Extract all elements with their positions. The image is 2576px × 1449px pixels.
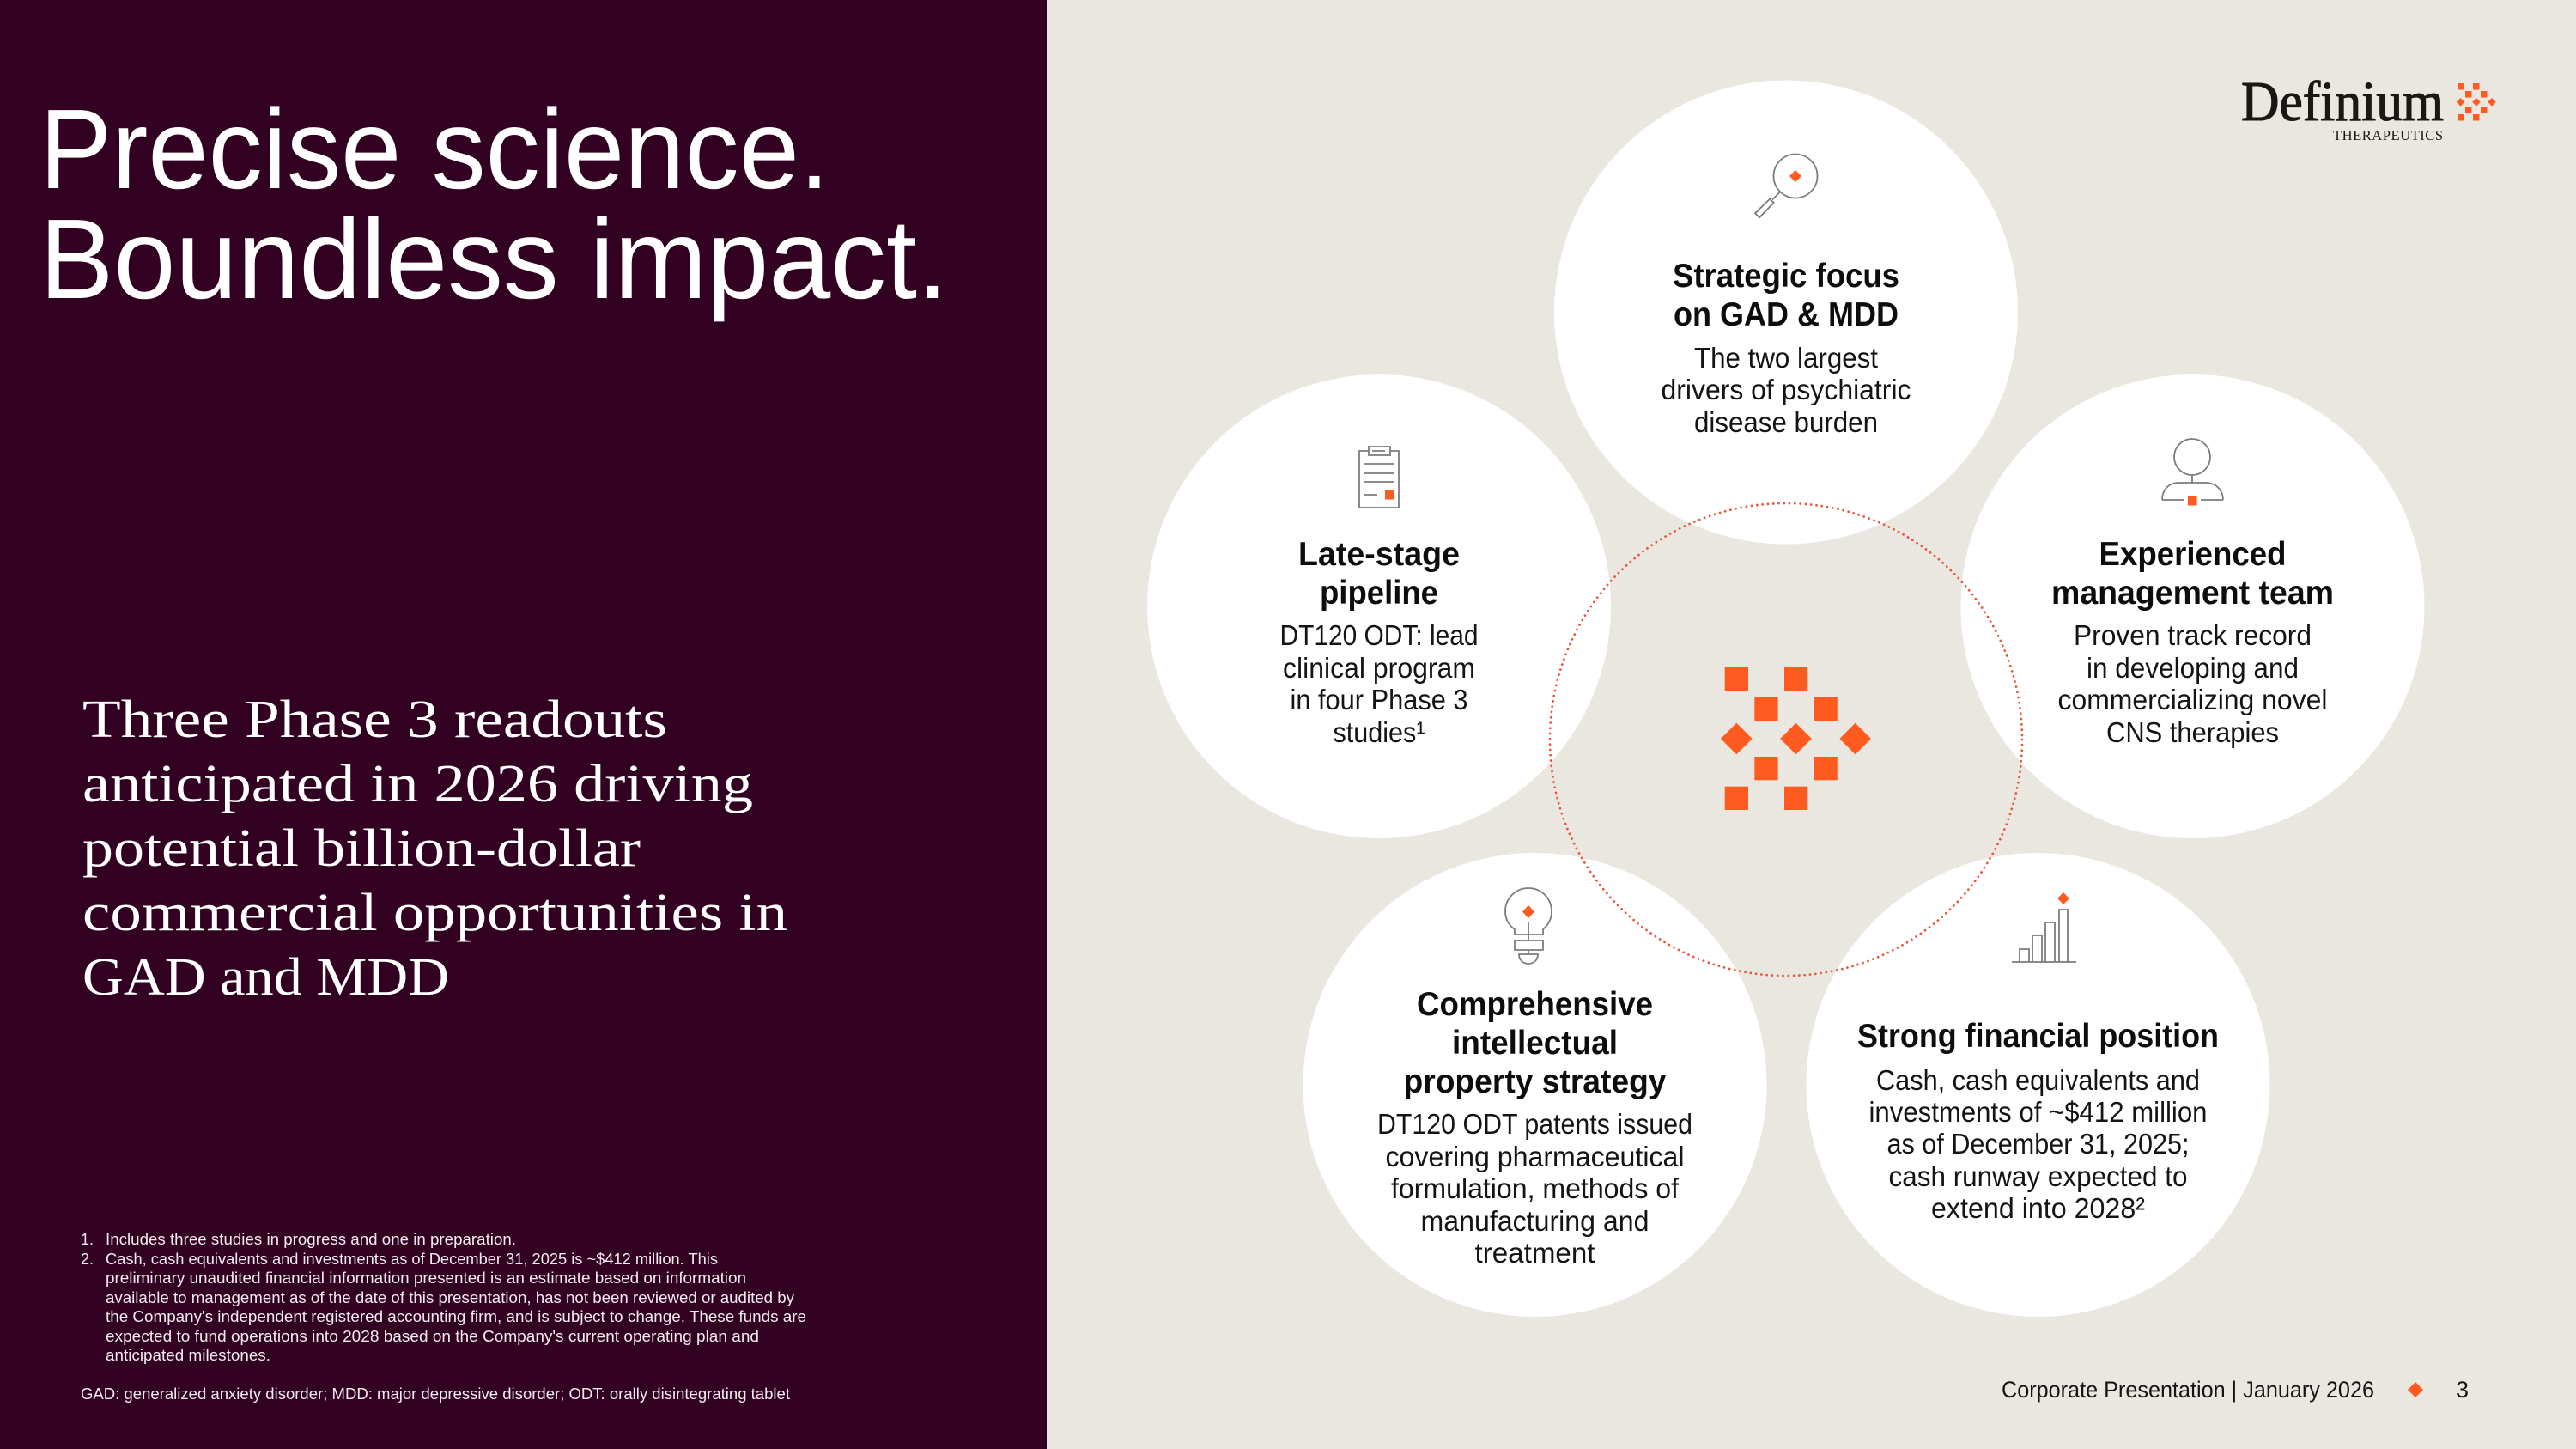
subtitle text block: commercial opportunities in bbox=[82, 884, 787, 942]
panel: left dark panel bbox=[0, 0, 1047, 1449]
icon: central diamond and square mark bbox=[1721, 667, 1871, 810]
heading: pipeline bbox=[1320, 575, 1438, 612]
body text: DT120 ODT: lead bbox=[1279, 620, 1479, 652]
body text: drivers of psychiatric bbox=[1661, 374, 1911, 406]
subtitle text block bbox=[82, 691, 787, 1007]
footnotes: the Company's independent registered accounting firm, and is subject to change. These funds are bbox=[106, 1308, 806, 1325]
icon: person bbox=[2162, 439, 2223, 505]
footnotes: Cash, cash equivalents and investments as of December 31, 2025 is ~$412 million. This bbox=[106, 1251, 718, 1268]
body text: extend into 2028² bbox=[1931, 1193, 2145, 1225]
heading bbox=[1403, 986, 1667, 1100]
heading: property strategy bbox=[1403, 1063, 1667, 1100]
body text: commercializing novel bbox=[2057, 685, 2327, 716]
card: Strategic focus on GAD and MDD bbox=[1554, 81, 2018, 545]
footnotes: 1. bbox=[81, 1231, 94, 1248]
body text: treatment bbox=[1475, 1238, 1595, 1269]
card: Comprehensive intellectual property strategy bbox=[1303, 853, 1767, 1317]
footnotes: expected to fund operations into 2028 based on the Company's current operating plan and bbox=[106, 1328, 759, 1345]
footnotes: Includes three studies in progress and one in preparation. bbox=[106, 1231, 516, 1248]
heading: Experienced bbox=[2099, 536, 2286, 573]
footnotes: anticipated milestones. bbox=[106, 1347, 270, 1364]
footnotes: GAD: generalized anxiety disorder; MDD: major depressive disorder; ODT: orally disintegrating tablet bbox=[81, 1385, 790, 1403]
card: Experienced management team bbox=[1961, 374, 2425, 838]
body text: clinical program bbox=[1283, 653, 1475, 685]
body text: disease burden bbox=[1694, 407, 1878, 439]
subtitle text block: Three Phase 3 readouts bbox=[82, 691, 667, 749]
body text: CNS therapies bbox=[2106, 717, 2279, 749]
body text bbox=[1279, 620, 1479, 749]
body text bbox=[2057, 620, 2327, 749]
body text: DT120 ODT patents issued bbox=[1377, 1109, 1692, 1141]
title bbox=[39, 86, 948, 322]
footer: Corporate Presentation | January 2026 bbox=[2002, 1377, 2374, 1403]
title: Precise science. bbox=[39, 86, 829, 212]
subtitle text block: anticipated in 2026 driving bbox=[82, 755, 753, 813]
heading: Strong financial position bbox=[1857, 1018, 2219, 1055]
body text: cash runway expected to bbox=[1889, 1161, 2188, 1193]
icon: clipboard bbox=[1359, 447, 1399, 508]
body text bbox=[1377, 1109, 1692, 1269]
body text: studies¹ bbox=[1333, 717, 1425, 749]
body text: covering pharmaceutical bbox=[1386, 1142, 1685, 1173]
card: Late-stage pipeline bbox=[1147, 374, 1611, 838]
heading: intellectual bbox=[1452, 1025, 1618, 1062]
footnotes bbox=[81, 1231, 806, 1403]
heading bbox=[1298, 536, 1460, 612]
dotted center circle bbox=[1550, 503, 2022, 976]
subtitle text block: potential billion-dollar bbox=[82, 819, 641, 878]
body text: investments of ~$412 million bbox=[1868, 1097, 2207, 1129]
heading: on GAD & MDD bbox=[1674, 296, 1899, 333]
heading: Strategic focus bbox=[1673, 258, 1899, 295]
body text bbox=[1868, 1065, 2207, 1225]
logo: Definium Therapeutics: THERAPEUTICS bbox=[2333, 127, 2443, 143]
card: Strong financial position bbox=[1807, 853, 2270, 1317]
body text: The two largest bbox=[1694, 343, 1879, 374]
heading bbox=[1673, 258, 1899, 333]
title: Boundless impact. bbox=[39, 196, 948, 322]
body text: as of December 31, 2025; bbox=[1887, 1129, 2190, 1160]
body text: in developing and bbox=[2087, 653, 2299, 685]
body text bbox=[1661, 343, 1911, 439]
heading bbox=[2051, 536, 2334, 612]
heading: Comprehensive bbox=[1417, 986, 1653, 1023]
footnotes: preliminary unaudited financial information presented is an estimate based on information bbox=[106, 1269, 746, 1287]
body text: manufacturing and bbox=[1420, 1206, 1649, 1238]
logo: Definium Therapeutics: Definium bbox=[2241, 70, 2444, 133]
footnotes: 2. bbox=[81, 1251, 94, 1268]
body text: formulation, methods of bbox=[1391, 1173, 1680, 1205]
icon: bar chart bbox=[2012, 892, 2076, 962]
icon: light bulb bbox=[1505, 888, 1552, 964]
heading: management team bbox=[2051, 575, 2334, 612]
heading: Late-stage bbox=[1298, 536, 1460, 573]
icon: magnifying glass bbox=[1755, 155, 1817, 217]
body text: Proven track record bbox=[2074, 620, 2312, 652]
body text: in four Phase 3 bbox=[1290, 685, 1468, 716]
body text: Cash, cash equivalents and bbox=[1876, 1065, 2200, 1097]
subtitle text block: GAD and MDD bbox=[82, 948, 449, 1007]
footnotes: available to management as of the date of this presentation, has not been reviewed or audited by bbox=[106, 1289, 794, 1306]
footer: 3 bbox=[2456, 1377, 2469, 1403]
